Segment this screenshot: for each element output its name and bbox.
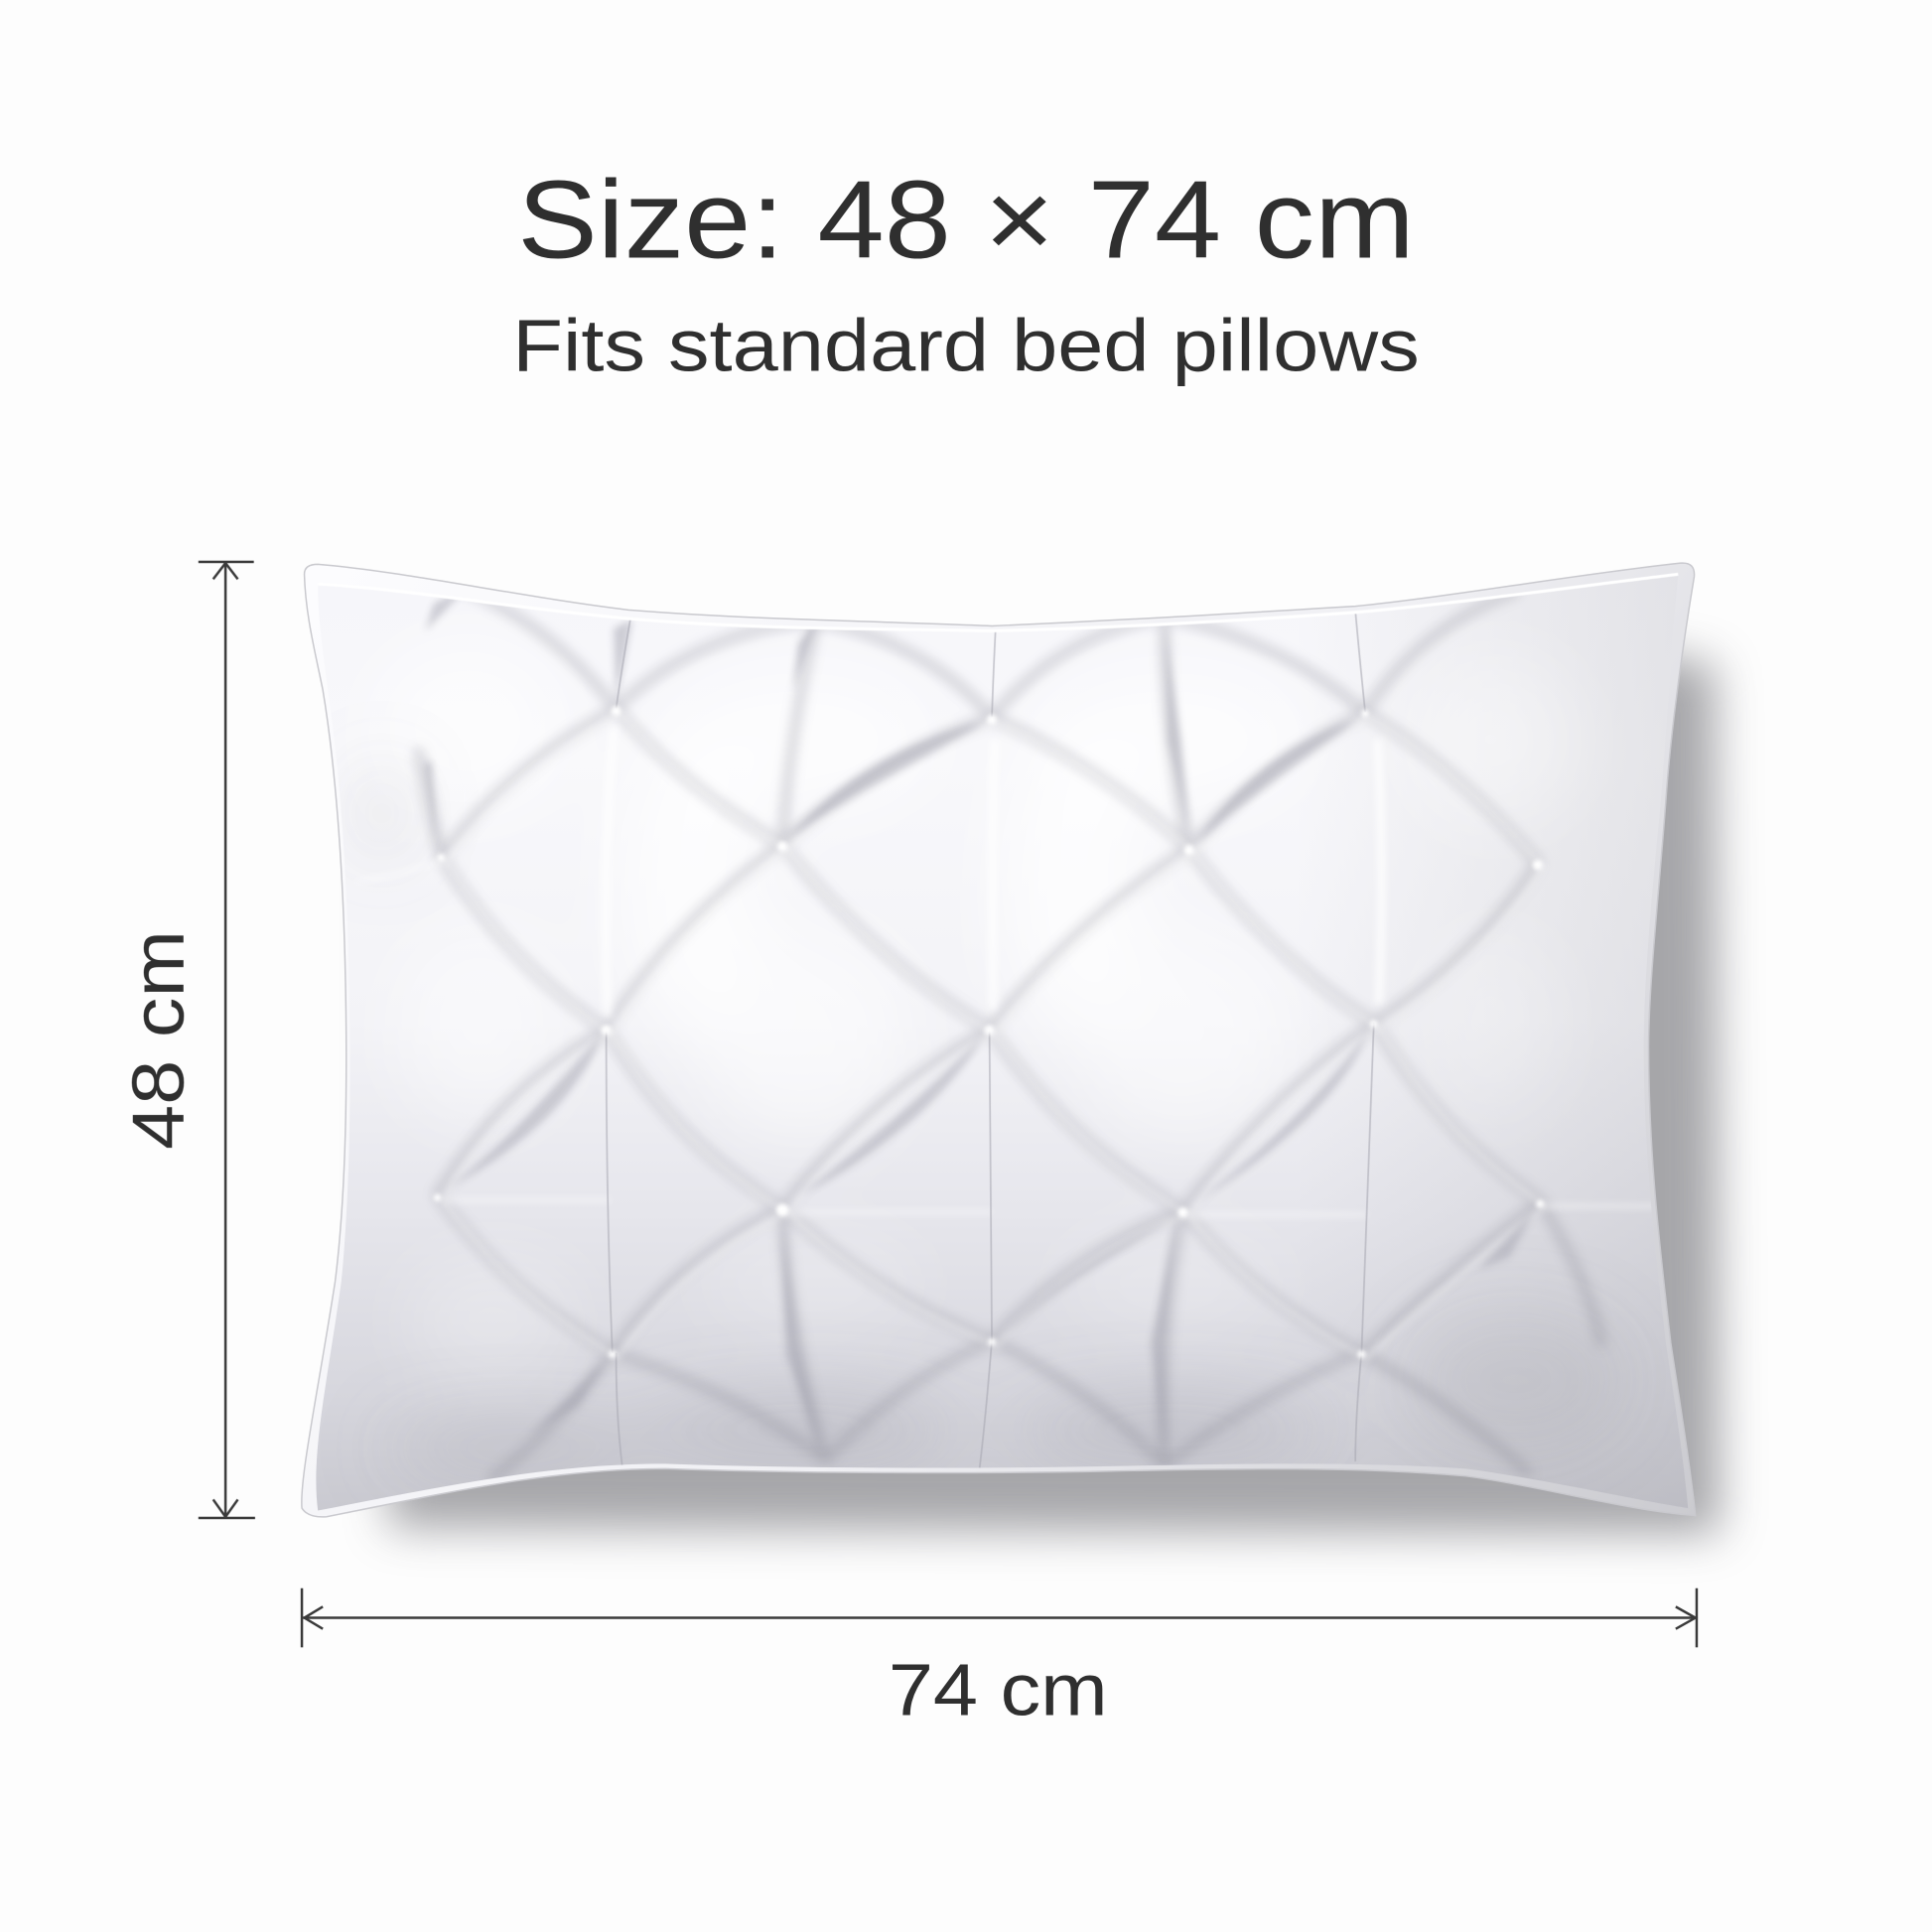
crease highlights — [356, 714, 1656, 1358]
subtitle: Fits standard bed pillows — [512, 305, 1420, 387]
infographic canvas — [131, 177, 1747, 1716]
crease shadows — [419, 589, 1601, 1478]
pinch points — [434, 706, 1544, 1358]
column seams — [607, 612, 1374, 1468]
right side shade — [1450, 576, 1688, 1508]
height dimension arrow — [199, 562, 255, 1518]
height label: 48 cm — [117, 930, 200, 1150]
seam highlights — [604, 865, 1383, 1018]
fold wedges — [424, 587, 1538, 1460]
shadow patches — [459, 1321, 1592, 1467]
fabric details — [356, 554, 1701, 1528]
title: Size: 48 × 74 cm — [517, 157, 1415, 281]
pillow body fabric — [316, 574, 1688, 1511]
pillow flange — [302, 563, 1696, 1517]
pillow piping — [318, 574, 1678, 630]
width label: 74 cm — [889, 1649, 1108, 1731]
pillow — [302, 554, 1701, 1528]
width dimension arrow — [302, 1588, 1697, 1647]
pillow drop shadow — [388, 653, 1721, 1534]
lit puffs — [766, 1066, 832, 1099]
